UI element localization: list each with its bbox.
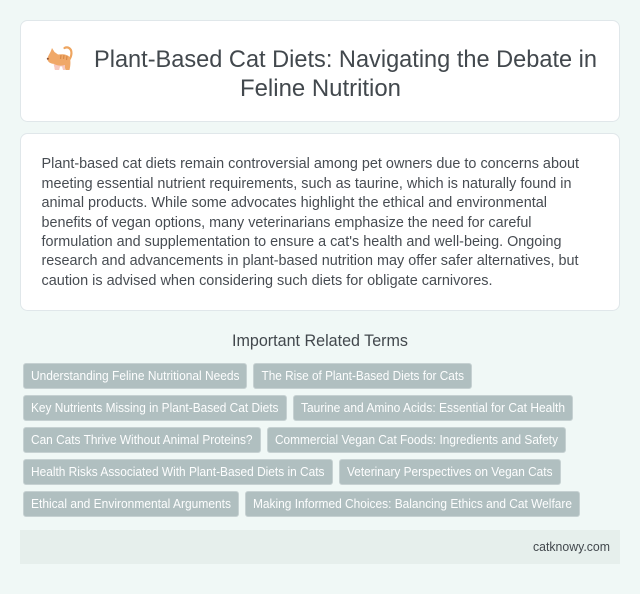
footer text: source: catknowy.com — [533, 539, 610, 554]
tag — [24, 492, 238, 516]
tag: Health Risks Associated With Plant-Based Diets in Cats — [31, 464, 324, 479]
tag: Taurine and Amino Acids: Essential for Cat Health — [301, 400, 565, 415]
tag — [24, 428, 260, 452]
description text: animal products. While some advocates highlight the ethical and environmental — [42, 195, 547, 211]
tag: Commercial Vegan Cat Foods: Ingredients and Safety — [275, 432, 558, 447]
footer bar — [20, 530, 620, 564]
tag: Understanding Feline Nutritional Needs — [31, 368, 240, 383]
tag — [268, 428, 566, 452]
tag — [254, 364, 472, 388]
tag — [24, 396, 286, 420]
title: Feline Nutrition — [240, 75, 401, 102]
description text: formulation and supplementation to ensure a cat's health and well-being. Ongoing — [42, 234, 562, 250]
description text — [42, 156, 579, 289]
tag: Key Nutrients Missing in Plant-Based Cat Diets — [31, 400, 278, 415]
panel: description card — [20, 134, 620, 310]
panel: header card — [20, 20, 620, 122]
tag: Making Informed Choices: Balancing Ethics and Cat Welfare — [253, 496, 572, 511]
tag — [340, 460, 560, 484]
tag: Ethical and Environmental Arguments — [31, 496, 231, 511]
description text: caution is advised when considering such diets for obligate carnivores. — [42, 273, 492, 289]
tag: The Rise of Plant-Based Diets for Cats — [262, 368, 464, 383]
tag group: related terms — [24, 364, 580, 516]
title: Plant-Based Cat Diets: Navigating the Debate in — [94, 46, 597, 73]
tag — [246, 492, 580, 516]
tag: Can Cats Thrive Without Animal Proteins? — [31, 432, 252, 447]
title — [94, 46, 597, 102]
description text: benefits of vegan options, many veterinarians emphasize the need for careful — [42, 215, 532, 231]
tag — [24, 364, 246, 388]
icon: cat — [47, 48, 71, 70]
tag — [294, 396, 572, 420]
tag — [24, 460, 332, 484]
description text: meeting essential nutrient requirements, such as taurine, which is naturally found in — [42, 176, 572, 192]
heading: important related terms: Important Related Terms — [232, 332, 408, 350]
tag: Veterinary Perspectives on Vegan Cats — [347, 464, 552, 479]
description text: research and advancements in plant-based nutrition may offer safer alternatives, but — [42, 253, 578, 269]
description text: Plant-based cat diets remain controversial among pet owners due to concerns about — [42, 156, 579, 172]
